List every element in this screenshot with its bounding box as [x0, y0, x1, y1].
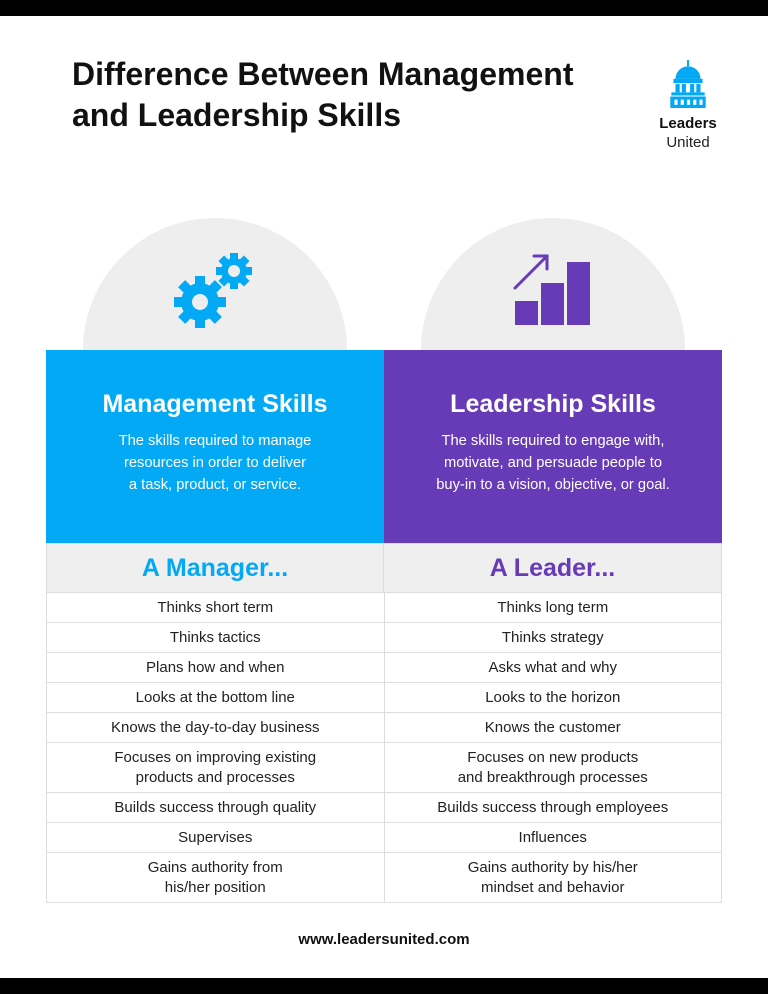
text: resources in order to deliver: [124, 455, 306, 471]
icon: growth chart: [513, 254, 590, 325]
header: leader: A Leader...: [490, 554, 615, 582]
text: buy-in to a vision, objective, or goal.: [436, 477, 670, 493]
comparison table: Looks to the horizon: [485, 688, 620, 706]
text: The skills required to manage: [119, 433, 311, 449]
logo: Leaders: [659, 115, 717, 132]
comparison table: his/her position: [165, 878, 266, 896]
text: motivate, and persuade people to: [444, 455, 662, 471]
heading: Management Skills: [102, 390, 328, 418]
circle: left: [83, 218, 347, 482]
comparison table: Focuses on improving existing: [114, 748, 316, 766]
comparison table: Thinks long term: [497, 598, 608, 616]
comparison table: Thinks short term: [157, 598, 273, 616]
title: [72, 56, 574, 133]
comparison table: Influences: [519, 828, 587, 846]
top bar: [0, 0, 768, 16]
circle: right: [421, 218, 685, 482]
text: [118, 433, 311, 493]
footer url: www.leadersunited.com: [298, 931, 470, 948]
header: manager: [47, 544, 384, 592]
comparison table: and breakthrough processes: [458, 768, 648, 786]
panel: leadership: [384, 350, 722, 543]
icon: capitol: [670, 60, 706, 108]
comparison table: Knows the day-to-day business: [111, 718, 319, 736]
comparison table: Supervises: [178, 828, 252, 846]
bottom bar: [0, 978, 768, 994]
comparison table: Thinks tactics: [170, 628, 261, 646]
comparison table: Looks at the bottom line: [136, 688, 295, 706]
icon: gears: [174, 253, 252, 328]
logo: United: [666, 134, 710, 151]
heading: Leadership Skills: [450, 390, 656, 418]
comparison table: Asks what and why: [489, 658, 617, 676]
title: Difference Between Management: [72, 56, 573, 92]
table header: [46, 543, 722, 592]
header: manager: A Manager...: [142, 554, 288, 582]
text: The skills required to engage with,: [442, 433, 664, 449]
panel: management: [46, 350, 384, 543]
comparison table: Focuses on new products: [467, 748, 638, 766]
comparison table: Gains authority from: [148, 858, 283, 876]
comparison table: products and processes: [136, 768, 295, 786]
comparison table: Thinks strategy: [502, 628, 604, 646]
comparison table: Gains authority by his/her: [468, 858, 638, 876]
title: and Leadership Skills: [72, 97, 401, 133]
comparison table: [46, 592, 722, 903]
text: a task, product, or service.: [129, 477, 301, 493]
comparison table: mindset and behavior: [481, 878, 624, 896]
logo: [659, 60, 717, 151]
comparison table: Plans how and when: [146, 658, 284, 676]
comparison table: Builds success through quality: [114, 798, 316, 816]
text: [436, 433, 670, 493]
comparison table: Builds success through employees: [437, 798, 668, 816]
comparison table: Knows the customer: [485, 718, 621, 736]
